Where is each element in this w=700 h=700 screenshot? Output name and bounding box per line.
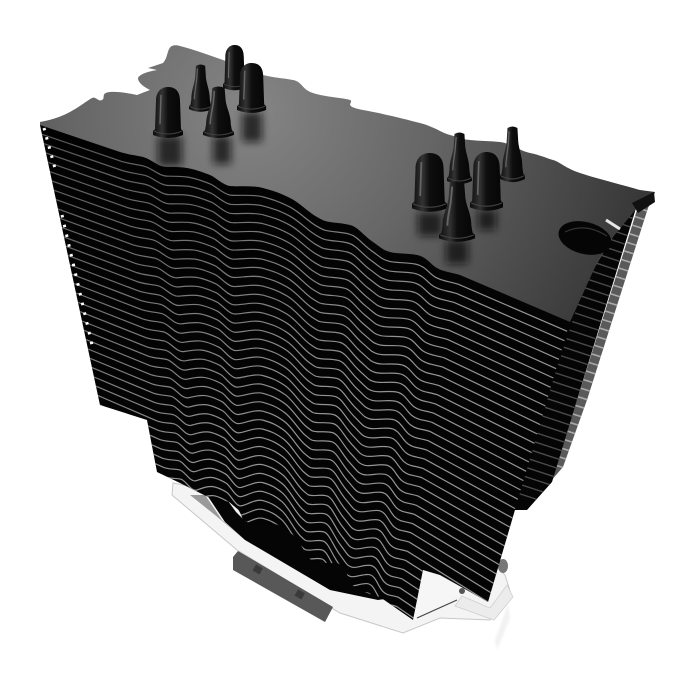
cap 10 [439, 181, 475, 242]
clip notch one [253, 564, 263, 574]
shadowed cavity under fins [207, 495, 410, 600]
cap 3 [237, 63, 266, 113]
corner tab [632, 192, 655, 213]
cap 6 [500, 126, 525, 182]
darker shading over upper left fins [40, 125, 429, 454]
cap 2 [223, 45, 246, 90]
cap 7 [447, 133, 472, 184]
base edge line [417, 600, 457, 618]
heatpipe reflections on top plate [158, 112, 496, 264]
small screw [459, 588, 465, 594]
side fin edges: black folded loops [515, 210, 636, 510]
mounting base plate [172, 483, 513, 650]
cap 4 [153, 87, 183, 138]
left group of heatpipe caps [153, 45, 266, 138]
side fin edges: outer grey strip [553, 206, 649, 478]
clip notch two [295, 589, 305, 599]
loop highlights [530, 215, 625, 505]
hole inner rim [565, 228, 607, 236]
cap 8 [412, 153, 447, 212]
shaded arm of the base [190, 495, 245, 540]
illustration: CPU tower cooler [40, 45, 655, 646]
mounting hole [555, 216, 615, 260]
top fin plate [40, 45, 655, 322]
heatsink front fin stack [40, 125, 568, 620]
cap 1 [189, 65, 212, 112]
screw tail reflection [495, 604, 510, 650]
left edge serrated fin tips [44, 128, 92, 345]
bracket corner [455, 585, 513, 620]
right group of heatpipe caps [412, 126, 525, 242]
standoff post [498, 559, 508, 573]
white triangular gap in base [413, 570, 470, 620]
corner tab highlight [606, 220, 620, 229]
grey strip stripes [560, 200, 645, 470]
base highlight [228, 501, 246, 522]
fin edge highlights [42, 134, 568, 618]
retention clip [233, 551, 333, 622]
cap 5 [203, 87, 234, 138]
cap 9 [470, 152, 503, 211]
